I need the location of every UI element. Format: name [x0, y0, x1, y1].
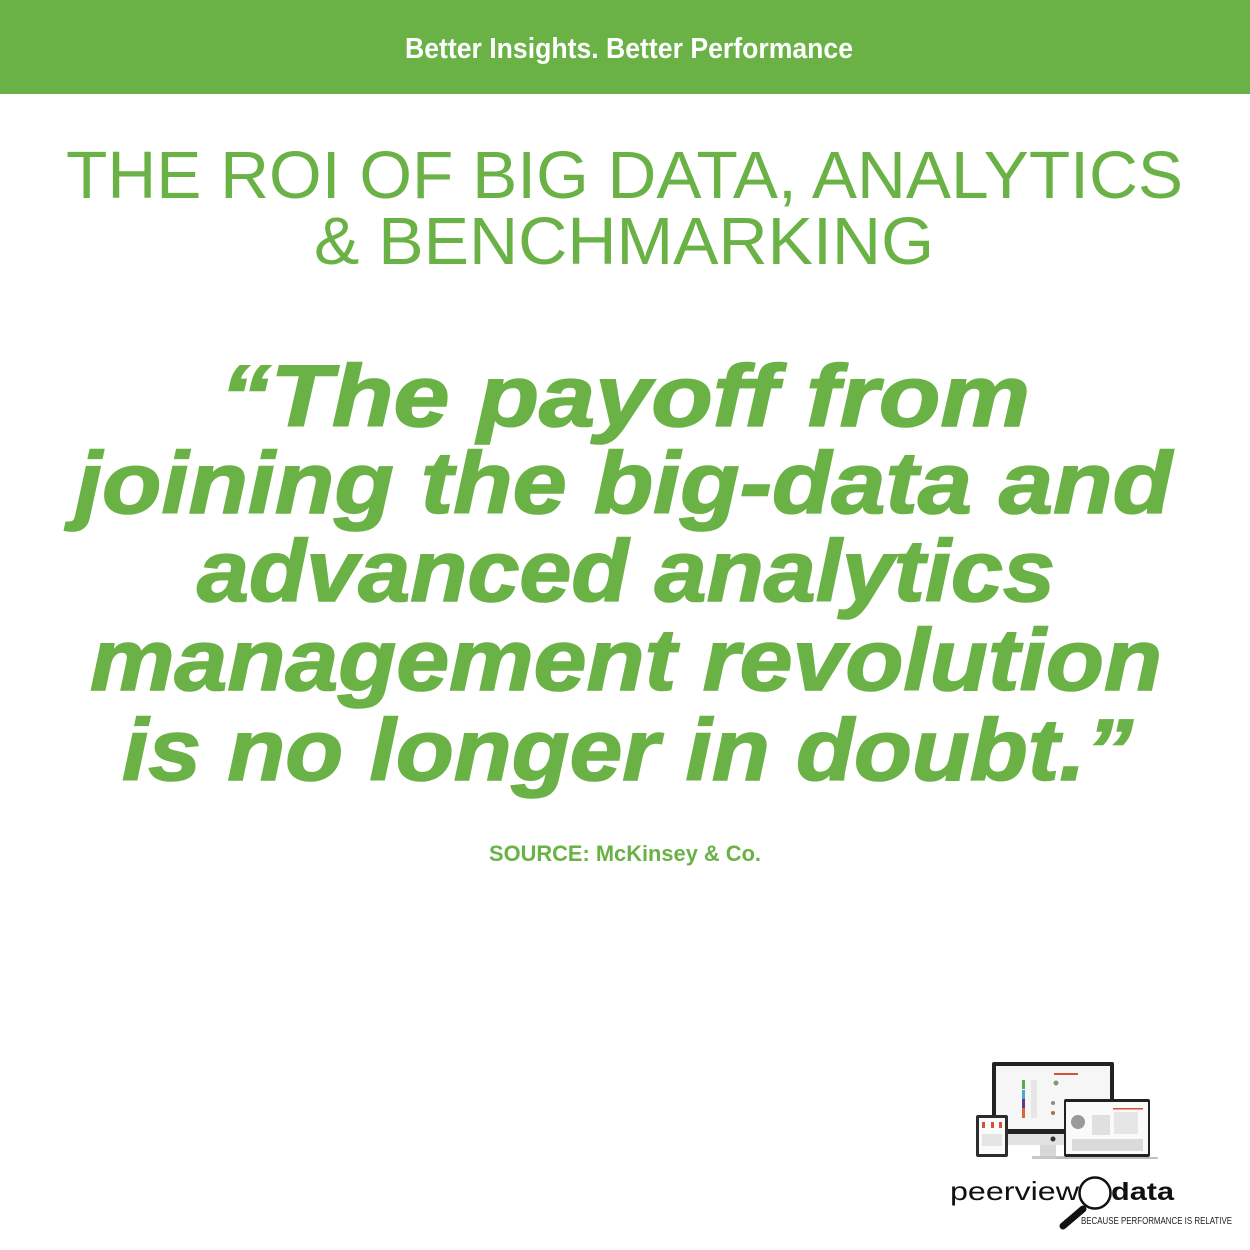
- header banner: [0, 0, 1250, 94]
- source line: SOURCE: McKinsey & Co.: [489, 841, 761, 866]
- quote: [64, 348, 1174, 799]
- quote: joining the big-data and: [64, 435, 1174, 532]
- title: THE ROI OF BIG DATA, ANALYTICS: [66, 138, 1183, 213]
- title: [66, 138, 1183, 279]
- icon: magnifying glass: [1063, 1178, 1110, 1226]
- header banner: Better Insights. Better Performance: [405, 33, 853, 65]
- icon: tablet: [976, 1115, 1008, 1157]
- icon: laptop: [1055, 1099, 1158, 1159]
- title: & BENCHMARKING: [314, 204, 934, 279]
- icon: desktop monitor: [992, 1062, 1114, 1159]
- logo: peerview data wordmark: data: [1111, 1178, 1175, 1206]
- logo: peerview data wordmark: peerview: [950, 1176, 1079, 1206]
- quote: advanced analytics: [197, 523, 1055, 620]
- quote: “The payoff from: [220, 348, 1030, 445]
- logo: peerview data wordmark: [950, 1176, 1232, 1227]
- quote: management revolution: [90, 612, 1162, 709]
- logo: device mockups: [976, 1062, 1158, 1159]
- quote: is no longer in doubt.”: [122, 702, 1134, 799]
